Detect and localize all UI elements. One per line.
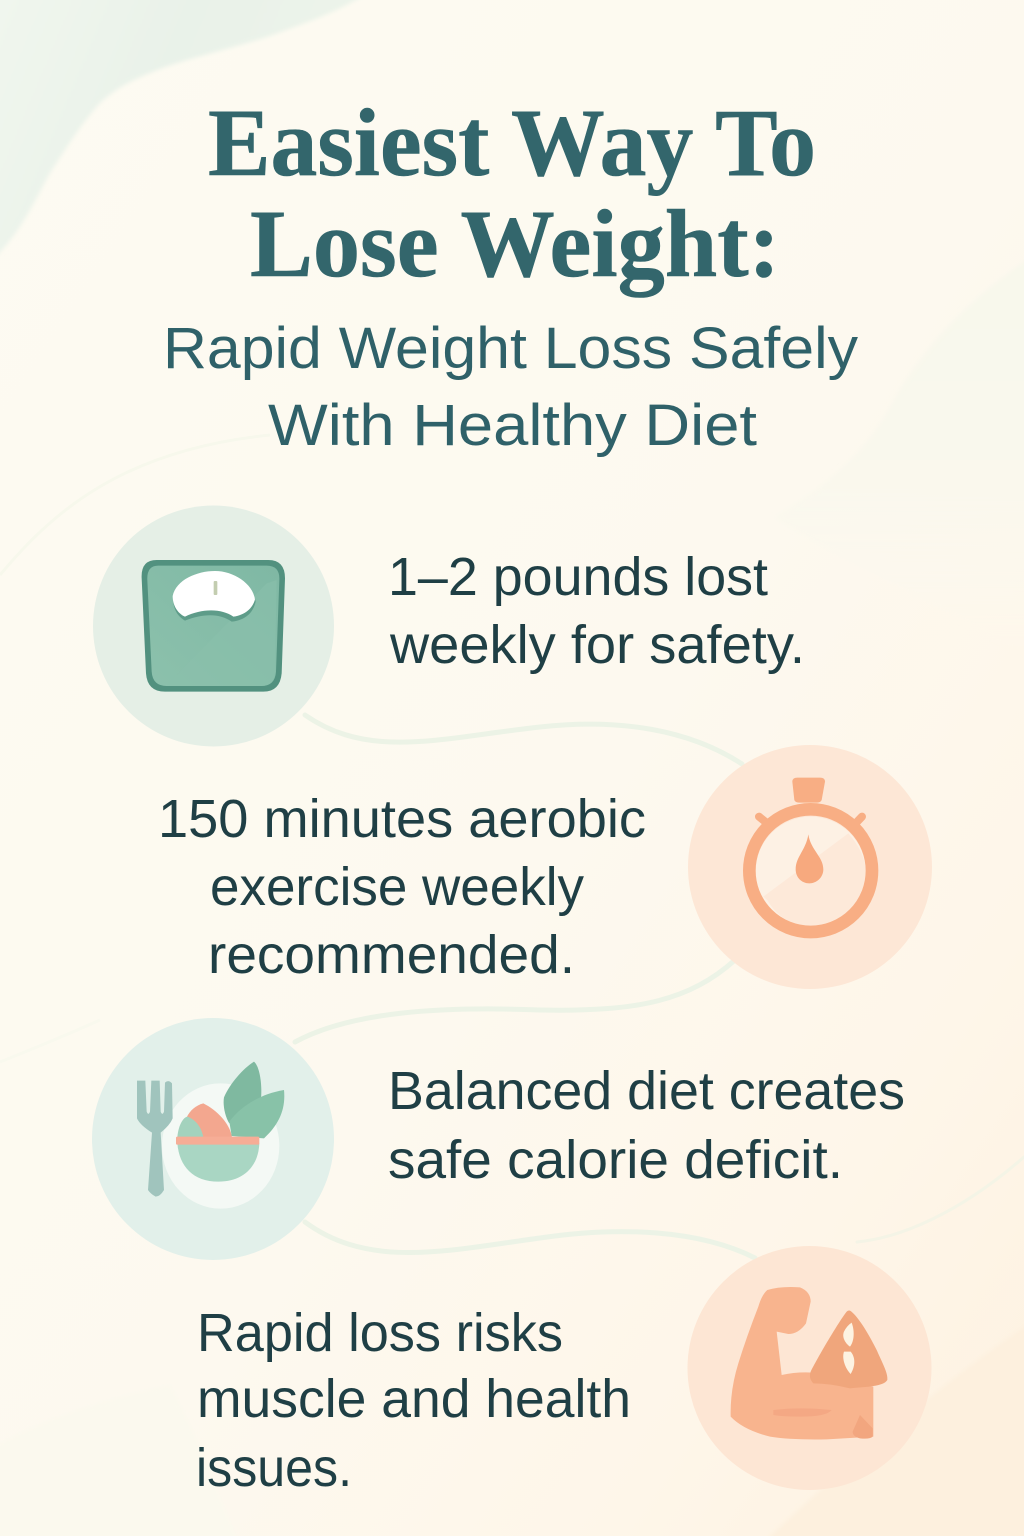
icon: stopwatch	[688, 745, 932, 989]
connector lines	[295, 715, 1024, 1258]
text: pounds lost: 1–2 pounds lost	[388, 547, 768, 607]
text: rapid loss risks: issues.	[196, 1438, 352, 1498]
text: balanced diet: Balanced diet creates	[388, 1061, 905, 1121]
text: aerobic exercise: 150 minutes aerobic	[158, 789, 646, 849]
text: aerobic exercise: recommended.	[208, 925, 575, 985]
text: aerobic exercise	[158, 789, 646, 985]
title: Lose Weight:	[250, 190, 780, 297]
text: rapid loss risks	[196, 1303, 631, 1498]
bowl rim	[176, 1137, 259, 1145]
fork	[137, 1081, 173, 1197]
food	[187, 1103, 232, 1137]
title	[208, 89, 816, 297]
plate	[162, 1083, 279, 1209]
subtitle: With Healthy Diet	[268, 393, 757, 458]
text: pounds lost	[388, 547, 805, 675]
text: balanced diet: safe calorie deficit.	[388, 1130, 843, 1190]
bowl	[177, 1143, 259, 1182]
text: pounds lost: weekly for safety.	[389, 615, 805, 675]
subtitle: Rapid Weight Loss Safely	[163, 316, 858, 381]
text: aerobic exercise: exercise weekly	[210, 857, 584, 917]
text: balanced diet	[388, 1061, 905, 1190]
leaves	[224, 1062, 261, 1123]
text: rapid loss risks: Rapid loss risks	[197, 1303, 563, 1363]
text: rapid loss risks: muscle and health	[197, 1369, 631, 1429]
icon: bathroom scale	[93, 506, 334, 746]
subtitle	[163, 316, 858, 458]
title: Easiest Way To	[208, 89, 816, 196]
icon: flexed muscle and warning	[688, 1246, 932, 1490]
icon: healthy plate	[92, 1018, 334, 1260]
